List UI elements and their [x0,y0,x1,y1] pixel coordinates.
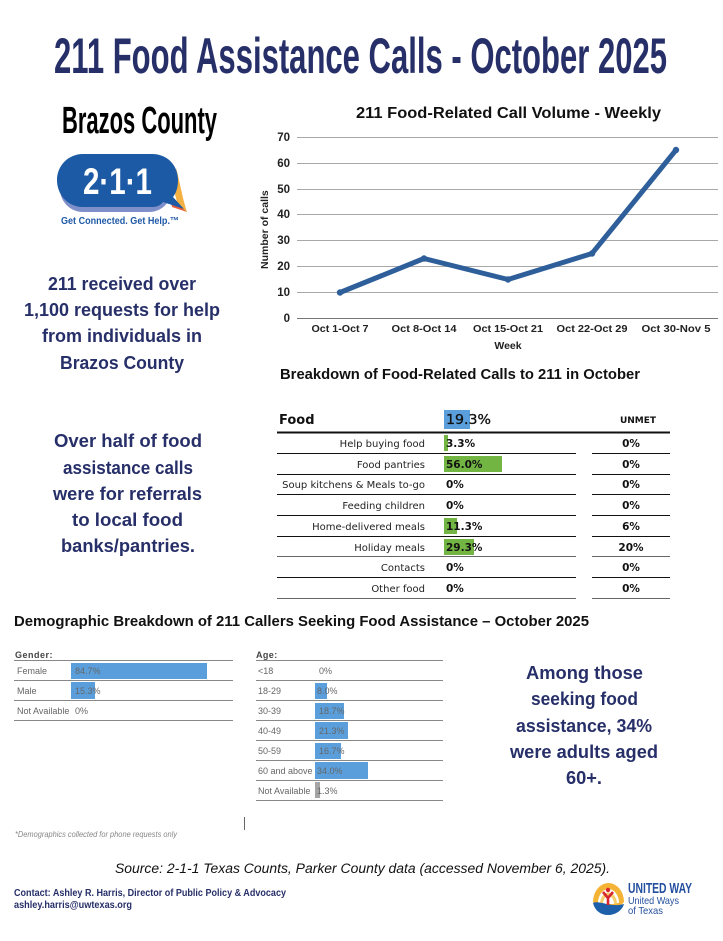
age labels: 40-49 [258,726,281,736]
text block: food bank referrals: were for referrals [52,484,202,504]
gender labels: Female [17,666,47,676]
age labels: 18.7% [319,706,345,716]
text block: food bank referrals: banks/pantries. [61,536,195,556]
y axis labels: 50 [277,184,290,196]
contact block [14,888,286,911]
x axis labels: Oct 22-Oct 29 [556,323,628,335]
age labels: 1.3% [317,786,338,796]
age labels: 50-59 [258,746,281,756]
age labels: 30-39 [258,706,281,716]
gender labels: 15.3% [75,686,101,696]
table percentages: 0% [446,500,464,512]
gender labels [17,666,101,716]
table header row: 19.3% [446,413,491,428]
contact block: ashley.harris@uwtexas.org [14,900,132,911]
age labels: <18 [258,666,273,676]
table row labels: Contacts [381,563,425,574]
table header row [279,413,657,428]
table unmet column: 0% [622,459,640,471]
logo: United Way: UNITED WAY [628,881,692,897]
text block: food bank referrals: to local food [72,510,183,530]
gender labels: 84.7% [75,666,101,676]
table percentages: 29.3% [446,542,483,554]
x axis labels: Oct 8-Oct 14 [392,323,457,335]
age labels: 16.7% [319,746,345,756]
table unmet column: 6% [622,521,640,533]
x axis labels: Oct 15-Oct 21 [473,323,543,335]
text block: food bank referrals [52,431,202,556]
table percentages: 56.0% [446,459,483,471]
gender labels: Male [17,686,37,696]
text block: older adults callout: 60+. [566,768,602,788]
county heading: Brazos County [62,100,217,142]
text block: total requests: from individuals in [42,326,202,346]
table row labels: Food pantries [357,460,425,471]
text block: total requests [24,274,220,373]
y axis labels: 60 [277,158,290,170]
logo: 2-1-1 speech bubble: 2·1·1 [83,161,152,202]
line chart: weekly call volume [259,105,718,352]
age labels: 60 and above [258,766,313,776]
table row labels: Holiday meals [354,543,425,554]
table row labels [282,439,425,595]
age bars [315,683,368,798]
x axis labels: Oct 1-Oct 7 [312,323,369,335]
table unmet column: 0% [622,562,640,574]
table header row: Food [279,413,315,428]
table bars [444,410,502,555]
y axis labels: 40 [277,209,290,221]
table header row: UNMET [620,416,657,426]
chart title: 211 Food-Related Call Volume - Weekly [356,105,661,122]
table percentages [446,438,483,595]
table: age: Age: [256,650,278,660]
table unmet column: 0% [622,479,640,491]
gender labels: 0% [75,706,88,716]
logo: 2-1-1 speech bubble [57,154,187,227]
logo: 2-1-1 speech bubble: Get Connected. Get Help.™ [61,216,179,227]
age labels: 0% [319,666,332,676]
age labels [258,666,345,796]
y axis labels: 20 [277,261,290,273]
age labels: 18-29 [258,686,281,696]
text block: older adults callout: were adults aged [509,742,658,762]
age labels: 8.0% [317,686,338,696]
table percentages: 0% [446,562,464,574]
data line [337,147,679,296]
table row labels: Help buying food [340,439,425,450]
logo: United Way: of Texas [628,905,663,917]
table unmet column [618,438,644,595]
table rules [277,432,670,598]
y axis labels: 10 [277,287,290,299]
demographics heading: Demographic Breakdown of 211 Callers Seeking Food Assistance – October 2025 [14,614,589,630]
y axis labels: 0 [284,313,290,325]
footnote: *Demographics collected for phone requests only [15,830,178,839]
table unmet column: 20% [618,542,644,554]
x axis title: Week [494,340,522,352]
table row labels: Soup kitchens & Meals to-go [282,480,425,491]
y axis labels [277,132,290,325]
text block: total requests: 1,100 requests for help [24,300,220,320]
table: age [256,650,443,800]
contact block: Contact: Ashley R. Harris, Director of Public Policy & Advocacy [14,888,286,899]
x axis labels: Oct 30-Nov 5 [642,323,711,335]
table percentages: 0% [446,583,464,595]
source line: Source: 2-1-1 Texas Counts, Parker County data (accessed November 6, 2025). [115,861,610,876]
y axis labels: 30 [277,235,290,247]
age labels: 21.3% [319,726,345,736]
y axis title: Number of calls [259,190,271,269]
text block: older adults callout [509,663,658,788]
table unmet column: 0% [622,583,640,595]
table row labels: Feeding children [342,501,425,512]
table: food breakdown [277,410,670,598]
gender labels: Not Available [17,706,69,716]
logo: United Way [593,881,692,917]
table heading: Breakdown of Food-Related Calls to 211 in October [280,367,640,383]
text block: total requests: 211 received over [48,274,196,294]
table unmet column: 0% [622,500,640,512]
age labels: 34.0% [317,766,343,776]
gender bars [71,663,207,699]
age labels: Not Available [258,786,310,796]
table row labels: Home-delivered meals [312,522,425,533]
table percentages: 11.3% [446,521,483,533]
table unmet column: 0% [622,438,640,450]
text block: total requests: Brazos County [60,353,184,373]
table row labels: Other food [371,584,425,595]
logo: United Way: United Ways [628,895,679,907]
text block: food bank referrals: Over half of food [54,431,202,451]
table: gender [14,650,233,720]
x axis labels [312,323,711,335]
text block: older adults callout: assistance, 34% [516,716,652,736]
table percentages: 0% [446,479,464,491]
text block: older adults callout: seeking food [531,689,638,709]
text block: food bank referrals: assistance calls [63,458,193,478]
y axis labels: 70 [277,132,290,144]
table percentages: 3.3% [446,438,476,450]
text block: older adults callout: Among those [526,663,643,683]
table: gender: Gender: [15,650,53,660]
